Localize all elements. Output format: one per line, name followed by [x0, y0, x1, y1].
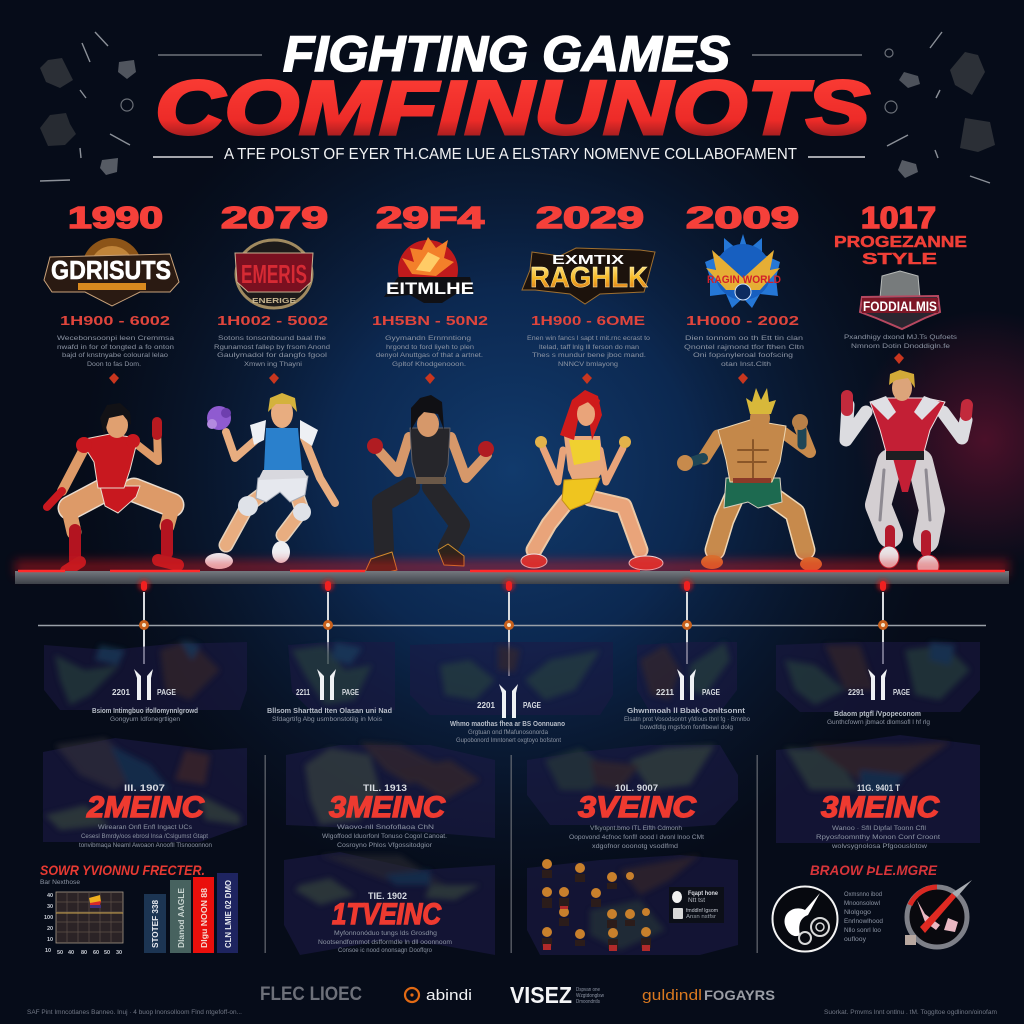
- logo: RAGHLK: [530, 262, 648, 294]
- line chart: 80: [81, 950, 87, 956]
- panel: lower card 1: Cesesl Bmrdy/oos ebrosl lnsa /Cslgumst Gtapt: [81, 833, 208, 840]
- panel: lower card 2: Wlgoffood lduorfonl Tonuso Cogol Canoat.: [322, 833, 447, 840]
- description: [844, 334, 958, 350]
- description: Thes s mundur bene jboc mand.: [532, 352, 646, 359]
- logo: EITMLHE: [386, 279, 474, 298]
- divider 3: [756, 755, 758, 953]
- logo: visez: VISEZ: [510, 982, 572, 1008]
- description: Gaulymadol for dangfo fgool: [217, 352, 328, 359]
- description: nwafd in for of tongted a fo onton: [57, 344, 174, 351]
- icon: glove and coins: [772, 886, 838, 952]
- decorative debris: top right: [885, 32, 995, 183]
- description: ltelad, taff lnlg lll ferson do man: [539, 344, 639, 351]
- description: Xmwn ing Thayni: [244, 361, 303, 368]
- panel: upper milestone 5: [776, 642, 980, 726]
- timeline pin 3: [503, 579, 515, 676]
- line chart: 30: [116, 950, 122, 956]
- description: Nmnom Dotin Dnoddigln.fe: [851, 343, 950, 350]
- year: 29F4: [376, 200, 485, 235]
- heading: BRAOW ÞLE.MGRE: [810, 862, 938, 878]
- card text: Vfkyopnt.bmo ITL Elfth Cdmonh: [590, 825, 682, 832]
- logo: flec: FLEC LIOEC: [260, 984, 362, 1005]
- description: Rgunamost fallep by frsom Anond: [214, 344, 330, 351]
- subtitle: A TFE POLST OF EYER TH.CAME LUE A ELSTARY NOMENVE COLLABOFAMENT: [224, 146, 797, 163]
- panel: upper milestone 1: [44, 640, 247, 723]
- logo: ENERIGE: [252, 298, 296, 305]
- logo: abindi: abindi: [426, 987, 472, 1004]
- divider 1: [264, 755, 266, 953]
- panel: lower card 4: [527, 745, 738, 850]
- logo: [235, 240, 313, 308]
- vertical bars: Dlanod AAGLE: [177, 887, 186, 948]
- panel: lower card 4: Oopovond 4cfnoc fonfl! oood l dvonl lnoo CMt: [569, 834, 704, 841]
- fighter 3: black outfit: [365, 395, 494, 574]
- panel: mini character roster: [527, 855, 738, 955]
- vertical bars: Dlgu NOON 88: [200, 887, 209, 948]
- panel: era column 5: [684, 200, 804, 384]
- panel: era column 1: [44, 200, 179, 384]
- panel: lower card 2: Cosroyno Phlos Vfgossitodgior: [337, 842, 433, 849]
- milestone date: 2201: [112, 688, 131, 697]
- description: [57, 335, 174, 368]
- panel: lower card 5: wolvsygnolosa Pfgoouslotow: [831, 843, 927, 850]
- panel: lower card 5: [776, 735, 980, 850]
- milestone date: 2211: [656, 688, 675, 697]
- text list: Mnoonsolowl: [844, 900, 880, 907]
- card text: Wirearan Onfl Enfl Ingact UCs: [98, 824, 193, 831]
- text list: Oxmsnno ibod: [844, 891, 882, 898]
- panel: upper milestone 4: [624, 642, 750, 731]
- card text: Wanoo · Sfll Dlpfal Toonn Cfll: [832, 825, 927, 832]
- date: TIL. 1913: [363, 783, 407, 793]
- panel: upper milestone 3: Gupobonord Imntonert oxgtoyo bofstont: [456, 737, 561, 744]
- chart title: SOWR YVIONNU FRECTER.: [40, 862, 205, 878]
- description: bajd of knstnyabe coloural lelao: [62, 352, 168, 359]
- panel: lower card 2: [286, 742, 495, 849]
- chart subtitle: Bar Nexthose: [40, 879, 80, 886]
- style caption: [834, 234, 967, 268]
- big label: 3MEINC: [821, 791, 940, 824]
- date range: 1H900 - 6002: [60, 313, 170, 328]
- app store box: Ansn nstfsr: [686, 914, 716, 920]
- date range: 1H002 - 5002: [217, 313, 328, 328]
- milestone date: 2201: [477, 701, 496, 710]
- description: Wecebonsoonpi leen Cremmsa: [57, 335, 174, 342]
- line chart: 30: [47, 904, 53, 910]
- logo: abindi: [405, 987, 472, 1004]
- panel: era column 6: [834, 200, 967, 364]
- logo: [705, 234, 781, 308]
- big label: 3MEINC: [329, 791, 446, 824]
- panel: brawl more: [772, 862, 972, 952]
- panel: lower card 1: tonvibmaqa Neaml Awoaon Anoofll Tlsnooonnon: [79, 842, 212, 849]
- line chart: 40: [68, 950, 74, 956]
- timeline pin 5: [877, 579, 889, 664]
- description: Doon to fas Dom.: [87, 361, 141, 368]
- line chart: 40: [47, 893, 53, 899]
- year: 2029: [536, 200, 644, 235]
- line chart: 10: [45, 948, 51, 954]
- fighter 1: red outfit: [47, 403, 178, 571]
- date: III. 1907: [124, 783, 165, 793]
- fighter 2: blue top and white shorts: [205, 393, 335, 569]
- date: TIE. 1902: [368, 891, 407, 901]
- vertical bars: CLN LMIE 02 DMO: [224, 880, 233, 948]
- diamond marker: [894, 353, 904, 364]
- divider 2: [510, 755, 512, 953]
- footer notes: [27, 1009, 997, 1016]
- milestone icon: [868, 669, 887, 700]
- line chart: 50: [57, 950, 63, 956]
- panel: lower card 3: Nootsendfornmot dsfformdle ln dll ooonnoom: [318, 939, 452, 946]
- year: 1017: [861, 200, 936, 235]
- logo: GDRISUTS: [51, 255, 171, 285]
- description: denyol Anuttgas of that a artnet.: [376, 352, 483, 359]
- fighter 4: yellow outfit and red hair: [521, 390, 663, 570]
- line chart: 50: [104, 950, 110, 956]
- text list: Nllo sonrl loo: [844, 927, 881, 934]
- logo: [522, 248, 655, 304]
- text list: Nlolgogo: [844, 909, 871, 916]
- milestone date: 2211: [296, 688, 310, 697]
- date: 11G. 9401 T: [857, 783, 900, 793]
- timeline connectors: [38, 579, 986, 676]
- logo: visez: Dmoondntls: [576, 999, 600, 1005]
- logo: EMERIS: [241, 259, 307, 289]
- line chart: 100: [44, 915, 53, 921]
- line chart: 60: [93, 950, 99, 956]
- year: 1990: [68, 200, 163, 235]
- diamond marker: [738, 373, 748, 384]
- footer logos: [260, 982, 775, 1008]
- description: Sotons tonsonbound baal the: [218, 335, 326, 342]
- app store box: Ntt tst: [688, 898, 705, 904]
- logo: fogayrs: FOGAYRS: [704, 987, 775, 1003]
- description: Qnontel rajmond tfor fthen Cltn: [684, 344, 804, 351]
- panel: upper milestone 2: PAGE: [342, 688, 360, 697]
- panel: upper milestone 3: [410, 642, 613, 744]
- text list: ouflooy: [844, 936, 867, 943]
- date range: 1H5BN - 50N2: [372, 313, 488, 328]
- panel: upper milestone 5: Gunthcfowrn jbmaot dlomsofl l hf rlg: [827, 719, 930, 726]
- milestone text: Whmo maothas fhea ar BS Oonnuano: [450, 721, 565, 728]
- style caption: PROGEZANNE: [834, 234, 967, 251]
- panel: upper milestone 5: PAGE: [893, 688, 911, 697]
- panel: lower card 3: [284, 852, 495, 955]
- panel: upper milestone 4: Elsatn prot Vosodsontrt yfdlous tbnl fg · Bmnbo: [624, 716, 750, 723]
- panel: upper milestone 2: Sfdagrtifg Abg usmbonstotilg in Mois: [272, 716, 383, 723]
- panel: upper milestone 1: Gongyum Idfonegrtligen: [110, 716, 180, 723]
- text list: Enrlnowlhood: [844, 918, 883, 925]
- milestone text: Bllsom Sharttad Iten Olasan uni Nad: [267, 708, 392, 715]
- panel: upper milestone 1: PAGE: [157, 688, 177, 697]
- app store box: Fqapt hone: [688, 890, 718, 897]
- timeline pin 2: [322, 579, 334, 664]
- big label: 1TVEINC: [332, 898, 442, 931]
- text list: [844, 891, 883, 943]
- panel: era column 3: [372, 200, 488, 384]
- description: otan lnst.Clth: [721, 361, 771, 368]
- description: NNNCV bmlayong: [558, 361, 618, 368]
- logo: visez: Wzgtdonglsw: [576, 993, 604, 999]
- fighter 5: muscular with green shorts: [677, 388, 822, 571]
- heading line one: FIGHTING GAMES: [283, 26, 730, 82]
- timeline pin 1: [138, 579, 150, 664]
- timeline pin 4: [681, 579, 693, 664]
- milestone icon: [677, 669, 696, 700]
- description: [376, 335, 483, 368]
- diamond marker: [109, 373, 119, 384]
- logo: [384, 237, 474, 303]
- logo: RAGIN WORLD: [707, 274, 781, 286]
- panel: upper milestone 3: PAGE: [523, 701, 542, 710]
- footer notes: Suorkat. Pmvms lnnt ontlnu . tM. Toggltoe ogdlinon/oinofam: [824, 1009, 997, 1016]
- line chart: [44, 892, 123, 956]
- milestone date: 2291: [848, 688, 864, 697]
- big label: 3VEINC: [578, 791, 697, 824]
- description: Gpltof Khodgenooon.: [392, 361, 466, 368]
- milestone icon: [134, 669, 153, 700]
- vertical bars: [144, 873, 238, 953]
- date: 10L. 9007: [615, 783, 658, 793]
- diamond marker: [269, 373, 279, 384]
- description: Enen win fancs l sapt t mit.rnc ecrast to: [527, 335, 650, 342]
- panel: lower card 4: xdgofnor ooonotg vsodlfmd: [592, 843, 678, 850]
- title block: [153, 26, 870, 163]
- big label: 2MEINC: [86, 791, 205, 824]
- diamond marker: [425, 373, 435, 384]
- icon: sword gauge: [905, 880, 972, 947]
- logo: visez: Dspvan one: [576, 987, 600, 993]
- description: [684, 335, 804, 368]
- description: Oni fopsnyleroal foofscing: [693, 352, 793, 359]
- date range: 1H000 - 2002: [686, 313, 799, 328]
- year: 2079: [221, 200, 328, 235]
- panel: upper milestone 4: PAGE: [702, 688, 721, 697]
- logo: FODDIALMIS: [863, 298, 937, 314]
- app store box: [669, 887, 724, 923]
- card text: Myfonnonóduo tungs lds Grosdhg: [334, 930, 437, 937]
- logo: [44, 238, 179, 306]
- milestone text: Ghwnmoah ll Bbak Oonltsonnt: [627, 708, 746, 715]
- mini character grid: [542, 859, 651, 951]
- decorative debris: top left: [40, 32, 136, 181]
- date range: 1H900 - 6OME: [531, 313, 645, 328]
- milestone icon: [499, 684, 518, 718]
- app store box: fmddlnf lgsom: [686, 908, 718, 914]
- description: hrgond to ford liyeh to plen: [386, 344, 474, 351]
- logo: EXMTIX: [552, 252, 624, 267]
- card text: Waovo-nll Snofoflaoa ChN: [337, 824, 434, 831]
- panel: lower card 3: Consoe ic nood ononsagn Dooffqro: [338, 947, 432, 954]
- panel: upper milestone 2: [267, 642, 395, 723]
- style caption: STYLE: [862, 251, 937, 268]
- milestone text: Bsiom Intimgbuo ifollomynnlgrowd: [92, 708, 198, 715]
- milestone icon: [317, 669, 336, 700]
- fighters: [47, 370, 967, 577]
- footer notes: SAF Pint Imncotlanes Banneo. Inuj · 4 buop lnonsolloom Flnd ntgefoff-on...: [27, 1009, 242, 1016]
- diamond marker: [582, 373, 592, 384]
- panel: era column 4: [522, 200, 655, 384]
- line chart: 20: [47, 926, 53, 932]
- logo: fogayrs: [642, 987, 775, 1004]
- platform stage: [15, 560, 1009, 584]
- milestone text: Bdaom ptgfl /Vpopeconom: [834, 711, 921, 718]
- panel: upper milestone 3: Grgtuan ond fMafunosonorda: [468, 729, 548, 736]
- description: Pxandhigy dxond MJ.Ts Qufoets: [844, 334, 958, 341]
- panel: lower card 1: [43, 738, 247, 849]
- description: Gyymandn Ernmntiong: [385, 335, 471, 342]
- description: Dien tonnom oo th Ett tin clan: [685, 335, 803, 342]
- description: [527, 335, 650, 368]
- panel: upper milestone 4: bowdfdlg mgsfom fonflbewl dolg: [640, 724, 733, 731]
- year: 2009: [686, 200, 799, 235]
- logo: [860, 271, 940, 329]
- line chart: 10: [47, 937, 53, 943]
- panel: bottom left chart: [40, 862, 238, 956]
- fighter 6: red and white costume: [846, 370, 967, 577]
- vertical bars: STOTEF 338: [151, 899, 160, 948]
- heading line two: COMFINUNOTS: [155, 66, 870, 151]
- description: [214, 335, 330, 368]
- panel: era column 2: [214, 200, 330, 384]
- panel: lower card 5: Rpyosfoomnthy Monon Conf Croont: [816, 834, 940, 841]
- logo: fogayrs: guldindl: [642, 987, 702, 1004]
